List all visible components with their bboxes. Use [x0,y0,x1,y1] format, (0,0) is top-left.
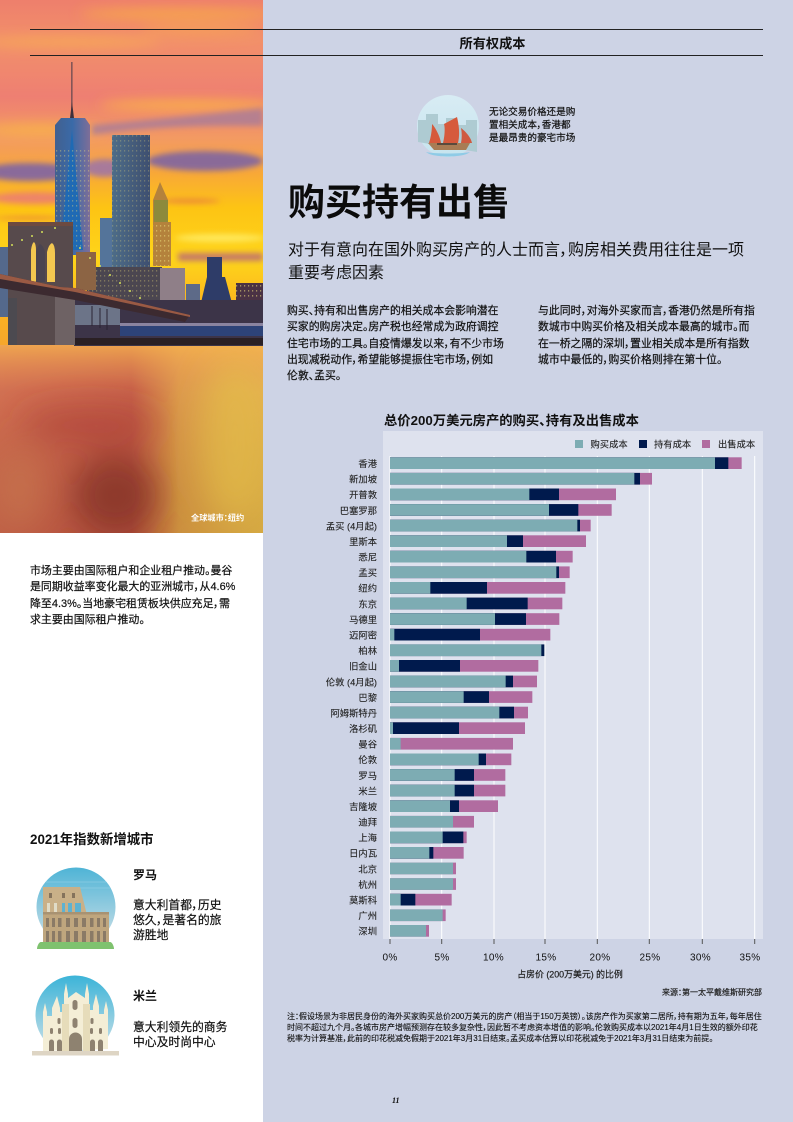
city bars: 广州 [358,910,377,921]
x axis title: 占房价 (200万美元) 的比例 [517,968,623,980]
building: Beekman [112,135,150,267]
body text: left column: 住宅市场的工具。自疫情爆发以来，有不少市场 [287,338,504,350]
footnote: 注：假设场景为非居民身份的海外买家购买总价200万美元的房产（相当于150万英镑）。该房产作为买家第二居所，持有期为五年，每年居住 [287,1012,762,1021]
icon: Colosseum [36,868,116,949]
legend: 持有成本 [654,438,691,450]
city bars: 巴塞罗那 [340,505,377,516]
city bars: 上海 [358,832,377,843]
building: WTC [55,118,90,255]
mid low-rise [87,267,162,307]
city bars: 北京 [358,863,377,874]
x axis labels: 20% [590,952,610,964]
city bars: 旧金山 [349,661,377,672]
text block: Bangkok: 是同期收益率变化最大的亚洲城市，从4.6% [30,581,235,593]
main heading: 购买持有出售 [288,182,510,223]
body text: right column: 城市中最低的，购买价格则排在第十位。 [538,354,722,366]
x axis labels: 35% [740,952,760,964]
city bars: 伦敦 [358,754,377,765]
Rome heading: 罗马 [133,868,157,882]
city bars: 里斯本 [349,536,377,547]
x axis labels: 25% [640,952,660,964]
header title: 所有权成本 [460,36,525,51]
body text: left column: 买家的购房决定。房产税也经常成为政府调控 [287,321,498,333]
Rome text [133,898,222,942]
text block: Bangkok [30,564,236,626]
cable lights [11,227,141,299]
subheading: 重要考虑因素 [288,265,384,282]
subheading: 对于有意向在国外购买房产的人士而言，购房相关费用往往是一项 [288,242,744,259]
city bars: 新加坡 [349,474,377,485]
body text: right column [538,304,755,366]
city bars: 伦敦 (4月起) [326,676,377,687]
body text: left column [287,304,504,382]
city bars: 曼谷 [358,740,377,750]
bridge deck [0,274,190,322]
footnote [287,1012,762,1043]
city bars: 马德里 [349,614,377,625]
far shore [74,300,263,346]
Milan text: 中心及时尚中心 [133,1035,216,1049]
city bars: 日内瓦 [349,848,377,859]
legend: 出售成本 [718,438,755,450]
text block: Bangkok: 求主要由国际租户推动。 [30,614,145,626]
x axis labels [382,952,760,964]
callout text: 是最昂贵的豪宅市场 [489,133,575,144]
x axis labels: 0% [382,952,398,964]
city bars: 阿姆斯特丹 [330,707,377,718]
footnote: 时间不超过九个月。各城市房产增幅预测存在较多复杂性，因此暂不考虑资本增值的影响。伦敦购买成本以2021年4月1日生效的额外印花 [287,1023,758,1032]
city bars: 莫斯科 [349,894,377,906]
footnote: 税率为计算基准，此前的印花税减免假期于2021年3月31日结束。孟买成本估算以印花税减免于2021年3月31日结束为前提。 [287,1034,713,1043]
city bars: 迪拜 [358,817,377,828]
city bars: 孟买 (4月起) [326,521,377,531]
city bars: 吉隆坡 [349,801,377,812]
x axis labels: 15% [536,952,556,964]
city bars: 开普敦 [349,489,377,500]
city bars: 悉尼 [358,552,377,562]
photo caption: 全球城市：纽约 [191,512,244,522]
city bars: 巴黎 [358,692,377,703]
water [0,345,263,533]
body text: right column: 数城市中购买价格及相关成本最高的城市。而 [538,321,749,333]
Rome text: 悠久，是著名的旅 [133,913,221,927]
city bars [326,457,742,937]
body text: right column: 在一桥之隔的深圳，置业相关成本是所有指数 [538,338,749,350]
Rome text: 意大利首都，历史 [133,898,221,912]
callout text: 置相关成本，香港都 [489,120,571,131]
city bars: 米兰 [358,785,377,796]
suspenders [92,306,107,330]
photo: New York skyline at sunset [0,0,263,533]
body text: left column: 购买、持有和出售房产的相关成本会影响潜在 [287,305,498,317]
icon: Milan cathedral [32,976,119,1056]
Rome text: 游胜地 [133,928,168,942]
body text: right column: 与此同时，对海外买家而言，香港仍然是所有指 [538,305,755,317]
city bars: 柏林 [358,645,378,656]
city bars: 洛杉矶 [349,723,377,734]
icon: junk boat [417,95,479,157]
bridge tower [8,225,73,345]
text block: Bangkok: 市场主要由国际租户和企业租户推动。曼谷 [30,565,232,577]
city bars: 杭州 [358,879,377,890]
body text: left column: 伦敦、孟买。 [287,370,341,382]
city bars: 孟买 [358,568,377,578]
x axis labels: 5% [434,952,450,964]
city bars: 东京 [358,598,377,609]
page number: 11 [392,1096,400,1105]
callout text: 无论交易价格还是购 [489,107,575,118]
subheading [288,241,744,282]
body text: left column: 出现减税动作，希望能够提振住宅市场，例如 [287,354,493,366]
heading: new cities: 2021年指数新增城市 [30,832,154,847]
source: 来源：第一太平戴维斯研究部 [662,987,762,997]
Woolworth [153,182,171,266]
legend: 购买成本 [590,438,628,450]
Milan heading: 米兰 [133,989,157,1003]
legend [575,438,755,450]
Milan text [133,1020,228,1049]
city bars: 迈阿密 [349,630,377,640]
header rules [30,29,763,56]
city bars: 深圳 [358,927,377,937]
text block: Bangkok: 降至4.3%。当地豪宅租赁板块供应充足，需 [30,598,230,610]
callout text [489,106,575,144]
distant buildings [200,257,233,317]
x axis labels: 10% [483,952,504,964]
Milan text: 意大利领先的商务 [133,1020,227,1034]
city bars: 纽约 [358,583,377,594]
chart title: 总价200万美元房产的购买、持有及出售成本 [384,413,639,428]
panel: right background [263,0,793,1122]
x axis labels: 30% [690,952,711,964]
city bars: 香港 [358,458,378,469]
city bars: 罗马 [358,771,377,781]
